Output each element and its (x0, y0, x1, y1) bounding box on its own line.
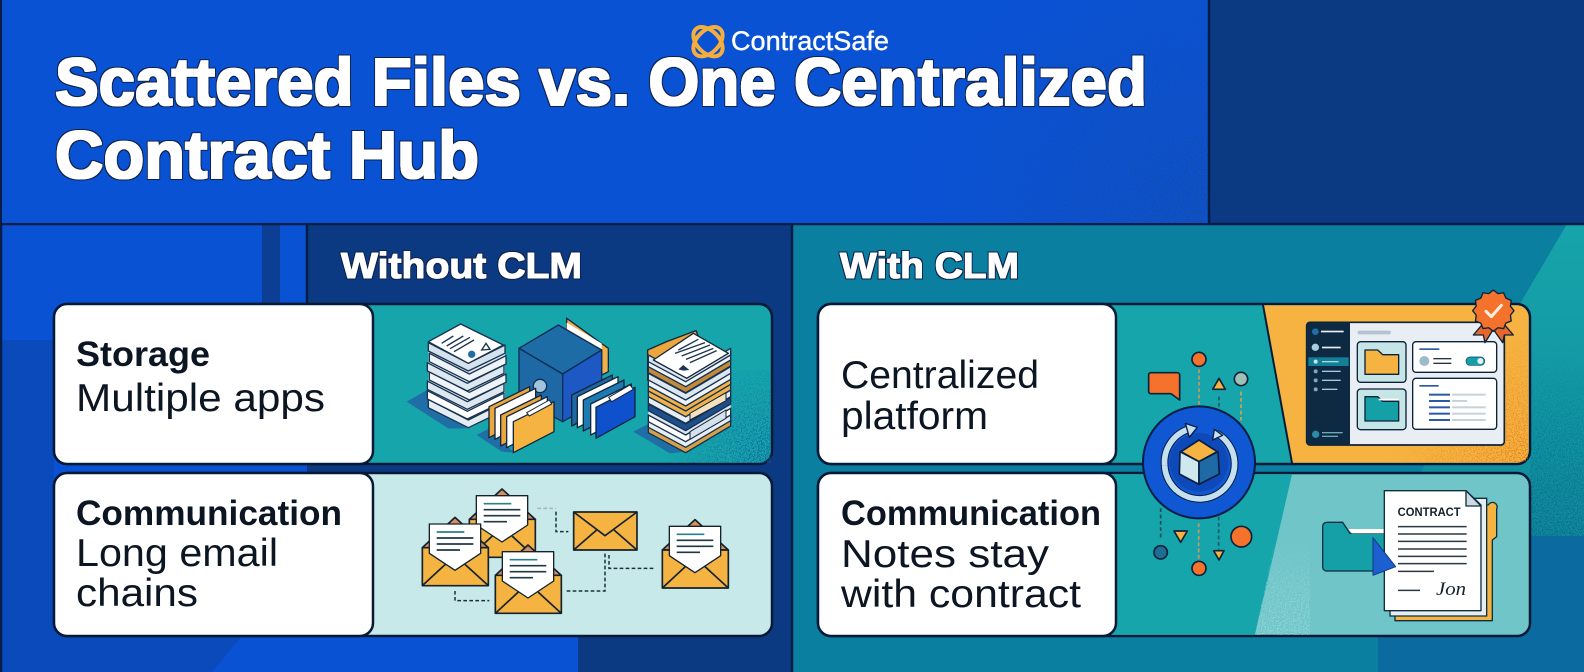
storage card: Storage (76, 335, 210, 374)
speckle (1255, 540, 1310, 635)
hub: floating shapes and connectors (1149, 352, 1252, 575)
icon: envelope right (662, 520, 728, 588)
logo: ContractSafe: ContractSafe (731, 26, 889, 56)
communication card: Long email (76, 532, 278, 575)
panel: with CLM platform row (818, 290, 1530, 464)
list card (1413, 378, 1497, 429)
storage card (54, 304, 373, 464)
panel: without CLM storage row (54, 304, 772, 464)
teal segment (1110, 474, 1292, 635)
illustration: dashboard (1307, 290, 1514, 445)
icon: closed envelope (574, 512, 637, 550)
cube (1179, 440, 1219, 484)
icon: verified badge (1473, 290, 1514, 343)
panel: header (2, 0, 1209, 224)
icon: safe with folders (477, 318, 635, 453)
illustration: contract with folder (1323, 491, 1497, 621)
heading: With CLM: With CLM (840, 245, 1019, 286)
illustration: contract with folder: Jon (1436, 579, 1466, 600)
centralized card (818, 304, 1116, 464)
orange platform background (1263, 305, 1529, 463)
communication card: Communication (76, 494, 342, 533)
folder tile: teal (1357, 389, 1406, 430)
dashed connectors (455, 508, 655, 601)
title (55, 45, 1147, 193)
dashboard sidebar (1307, 322, 1350, 445)
icon: envelope front (495, 545, 561, 613)
centralized card: platform (841, 395, 988, 438)
storage card: Multiple apps (76, 377, 325, 420)
illustration: contract with folder: CONTRACT (1398, 505, 1461, 519)
heading: Without CLM: Without CLM (341, 245, 582, 286)
centralized card: Centralized (841, 354, 1039, 397)
communication card (818, 473, 1116, 636)
folder tile: yellow (1357, 342, 1406, 382)
communication card: chains (76, 572, 198, 615)
communication card (54, 473, 373, 636)
logo: ContractSafe (688, 22, 889, 62)
communication card: with contract (840, 573, 1081, 616)
toggle card (1413, 342, 1497, 372)
panel: with CLM communication row (818, 473, 1530, 636)
icon: envelope left (422, 517, 488, 586)
sync arrows (1165, 423, 1235, 499)
title: Contract Hub (55, 118, 479, 193)
icon: envelope back (469, 489, 535, 557)
hub: central sync cube (1143, 406, 1255, 518)
communication card: Communication (841, 494, 1101, 533)
illustration: scattered files and safe (407, 318, 731, 453)
illustration: email chains (422, 489, 728, 613)
panel: without CLM communication row (54, 473, 772, 636)
icon: mixed stack (633, 331, 731, 453)
icon: paper stack (407, 324, 506, 428)
title: Scattered Files vs. One Centralized (55, 45, 1147, 120)
communication card: Notes stay (841, 533, 1050, 576)
